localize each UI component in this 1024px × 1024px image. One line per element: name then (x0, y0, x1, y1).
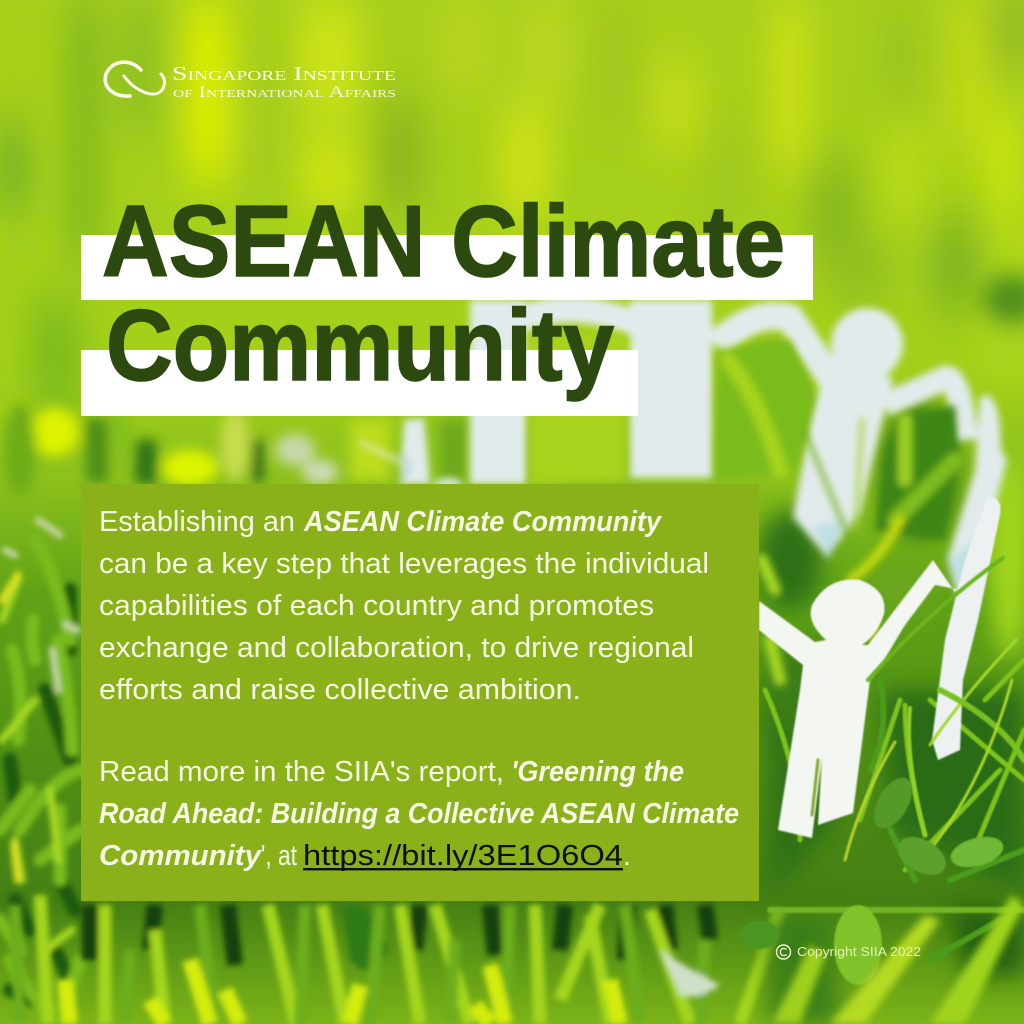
grass blades behind the figures (765, 660, 1024, 960)
paragraph: about the community: can be a key step that leverages the individual (99, 548, 709, 580)
paragraph: read more: Read more in the SIIA's report, (99, 756, 504, 788)
paper figure: front figure with raised arms (759, 560, 966, 838)
title text line 1: ASEAN Climate (102, 186, 785, 298)
paragraph: about the community (99, 506, 709, 706)
paragraph: read more (99, 756, 739, 872)
grass blades over the figure (812, 558, 1024, 860)
title highlight bars (81, 235, 813, 416)
left strip grass (0, 520, 80, 1020)
copyright notice (776, 945, 921, 959)
bottom strip grass (15, 895, 780, 1024)
logo: Singapore Institute of International Affairs (105, 62, 396, 101)
paragraph: about the community: ASEAN Climate Community (303, 506, 663, 538)
title text line 2: Community (106, 290, 614, 402)
soft vertical streaks in the upper area (0, 0, 1024, 410)
link underline (303, 868, 623, 870)
logo text: Singapore Institute (172, 63, 396, 85)
paragraph: about the community: efforts and raise collective ambition. (99, 674, 581, 706)
blurred background paper figures (360, 300, 1007, 605)
icon: copyright (776, 945, 790, 959)
paragraph: about the community: Establishing an (99, 506, 295, 538)
paragraph: read more: Community (99, 840, 263, 872)
copyright text: Copyright SIIA 2022 (797, 945, 921, 959)
paper figure: rear figure behind raised hand (932, 497, 1000, 760)
strip below the title: blurred stems and highlights (4, 404, 466, 496)
bright foreground blades, lower right corner (772, 895, 1024, 1024)
icon: SIIA swirl logo (105, 62, 165, 96)
paragraph: read more: 'Greening the (511, 756, 684, 788)
paragraph: read more: . (623, 840, 631, 872)
paragraph: about the community: capabilities of each country and promotes (99, 590, 654, 622)
link text: https://bit.ly/3E1O6O4 (303, 840, 623, 872)
paragraph: about the community: exchange and collaboration, to drive regional (99, 632, 694, 664)
title (81, 186, 813, 416)
leaves in lower right (740, 771, 1007, 985)
paragraph: read more: ', at (261, 840, 297, 872)
blurred blades over the figures (530, 335, 958, 680)
panel: description (81, 484, 759, 901)
paragraph: read more: Road Ahead: Building a Collective ASEAN Climate (99, 798, 739, 830)
logo: Singapore Institute of International Affairs: of International Affairs (173, 84, 396, 101)
lower right dark grass (770, 690, 1024, 1024)
